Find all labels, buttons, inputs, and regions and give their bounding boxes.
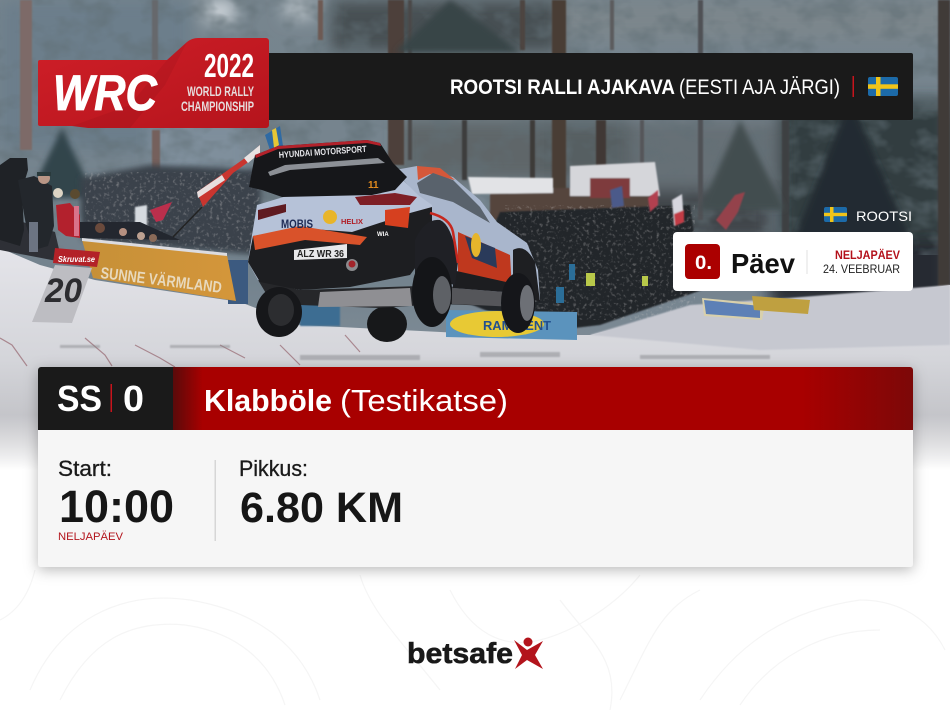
rear wing and window <box>249 140 407 197</box>
far rear wheel <box>367 306 407 342</box>
day number badge: 0. <box>695 253 712 274</box>
building with snowy roof <box>468 162 660 220</box>
body side <box>395 166 540 300</box>
car underbody <box>258 280 530 308</box>
background photo: rally car jumping in snowy forest <box>0 0 950 470</box>
tail lights <box>355 193 417 205</box>
day card: NELJAPÄEV <box>835 249 900 262</box>
rally car: 11 <box>368 180 379 191</box>
skruvat.se stage marker sign <box>32 248 100 323</box>
snow tracks <box>0 335 360 367</box>
day card: Päev <box>731 248 795 279</box>
stage number badge: SS <box>57 378 102 419</box>
panel: stage info <box>38 367 913 567</box>
forest backdrop <box>0 0 950 305</box>
wrc logo: WORLD RALLY <box>187 83 254 99</box>
crowd beneath the car <box>300 304 340 326</box>
stage length block: Pikkus: <box>239 456 308 481</box>
wrc logo: 2022 <box>204 47 254 84</box>
country label <box>824 207 912 224</box>
icon: sweden flag <box>868 77 898 96</box>
snow bank far right <box>590 285 950 350</box>
start time block <box>58 456 174 543</box>
day number badge <box>685 244 720 279</box>
header bar: (EESTI AJA JÄRGI) <box>679 76 840 99</box>
header bar <box>262 53 913 120</box>
far front wheel <box>501 273 535 333</box>
wrc logo: CHAMPIONSHIP <box>181 98 254 114</box>
background contour pattern <box>0 570 945 710</box>
flags in the distance <box>610 186 745 230</box>
distant crowd left <box>80 165 262 255</box>
exhaust <box>346 259 358 271</box>
near rear wheel <box>256 287 302 337</box>
header title: ROOTSI RALLI AJAKAVA <box>450 76 675 99</box>
betsafe logo: betsafe <box>407 638 513 670</box>
rally car: WIA <box>377 232 389 238</box>
mobis logo: MOBIS <box>281 217 313 231</box>
day card: 24. VEEBRUAR <box>823 264 900 276</box>
stage length block <box>239 456 403 532</box>
rear body <box>248 172 432 290</box>
fir trees <box>28 0 915 250</box>
red and white flag <box>150 126 283 237</box>
left spectators <box>0 158 248 304</box>
day card <box>673 232 913 291</box>
wrc logo: WRC <box>53 65 158 121</box>
skruvat.se stage marker sign: Skruvat.se <box>58 254 95 264</box>
stage header: red title bar <box>173 367 913 430</box>
stage length block: 6.80 KM <box>240 484 403 532</box>
country label: ROOTSI <box>856 208 912 224</box>
stage header: red title bar: (Testikatse) <box>340 383 508 418</box>
rally car <box>248 140 540 342</box>
start time block: 10:00 <box>59 481 174 532</box>
wrc logo <box>38 38 269 128</box>
helix ultra logo: HELIX <box>341 219 363 226</box>
icon: betsafe star figure <box>514 638 543 669</box>
start time block: NELJAPÄEV <box>58 531 124 543</box>
icon: sweden flag small <box>824 207 847 222</box>
crowd on right bank <box>460 205 702 332</box>
near front wheel <box>412 257 452 327</box>
skruvat.se stage marker sign: 20 <box>44 272 82 310</box>
stage header: red title bar: Klabböle <box>204 383 332 418</box>
start time block: Start: <box>58 456 112 481</box>
ramp sponsor banner: RAMIRENT <box>483 318 551 333</box>
licence plate <box>294 244 347 260</box>
shell logo <box>323 210 337 224</box>
orange sponsor banner: SUNNE VÄRMLAND <box>100 264 223 297</box>
forest needle texture <box>0 0 950 255</box>
ramp sponsor banner <box>446 310 577 340</box>
wheel arch <box>415 220 458 285</box>
orange sponsor banner <box>82 238 236 301</box>
stage number badge: 0 <box>123 378 144 419</box>
bottom fade to white <box>0 415 950 470</box>
rally car: HYUNDAI MOTORSPORT <box>278 144 367 160</box>
tree trunks <box>20 0 950 300</box>
snow ground <box>0 248 950 470</box>
rally car: ALZ WR 36 <box>297 249 344 260</box>
stage number badge <box>38 367 173 430</box>
front wheel arch <box>513 248 540 302</box>
